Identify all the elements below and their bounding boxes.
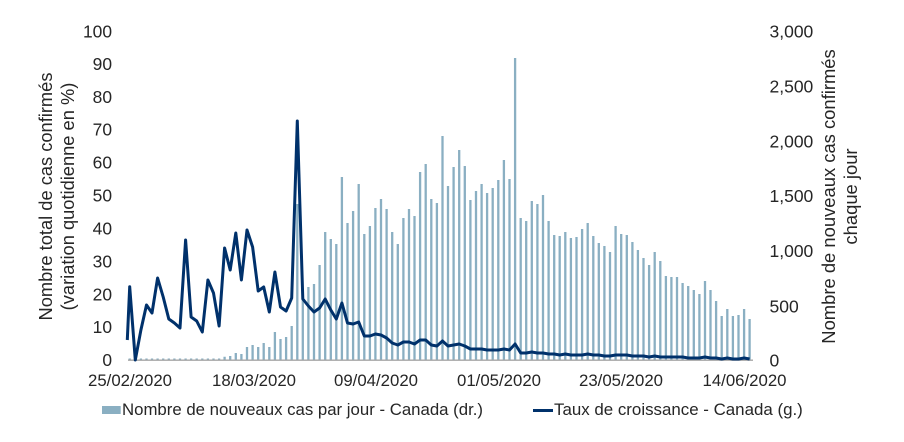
x axis date labels: 14/06/2020 bbox=[702, 371, 786, 390]
left axis tick labels: 60 bbox=[93, 153, 112, 173]
left axis tick labels: 50 bbox=[93, 185, 112, 205]
right axis tick labels bbox=[770, 22, 814, 370]
x axis date labels: 18/03/2020 bbox=[212, 371, 296, 390]
right axis tick labels: 2,500 bbox=[770, 76, 814, 96]
x axis date labels: 23/05/2020 bbox=[579, 371, 663, 390]
left axis tick labels: 0 bbox=[102, 350, 112, 370]
bars: new daily cases bbox=[130, 58, 750, 360]
left axis tick labels: 10 bbox=[93, 317, 112, 337]
right axis tick labels: 2,000 bbox=[770, 132, 814, 152]
right axis title: chaque jour bbox=[840, 148, 861, 245]
left axis title: (variation quotidienne en %) bbox=[57, 83, 78, 310]
legend label: line: Taux de croissance - Canada (g.) bbox=[554, 400, 803, 419]
right axis tick labels: 500 bbox=[770, 296, 799, 316]
left axis tick labels: 80 bbox=[93, 87, 112, 107]
right axis tick labels: 3,000 bbox=[770, 22, 814, 42]
right axis title: Nombre de nouveaux cas confirmés bbox=[818, 49, 839, 344]
line: growth rate bbox=[127, 121, 750, 360]
x axis baseline bbox=[128, 359, 753, 361]
left axis tick labels: 30 bbox=[93, 251, 112, 271]
x axis date labels: 25/02/2020 bbox=[88, 371, 172, 390]
right axis tick labels: 0 bbox=[770, 350, 780, 370]
legend label: bars: Nombre de nouveaux cas par jour - Canada (dr.) bbox=[122, 400, 483, 419]
right axis tick labels: 1,500 bbox=[770, 186, 814, 206]
left axis tick labels: 20 bbox=[93, 284, 112, 304]
x axis date labels: 09/04/2020 bbox=[334, 371, 418, 390]
left axis tick labels: 40 bbox=[93, 218, 112, 238]
legend bbox=[102, 400, 803, 419]
legend swatch: line bbox=[533, 409, 553, 412]
x axis date labels: 01/05/2020 bbox=[457, 371, 541, 390]
left axis tick labels: 100 bbox=[83, 22, 112, 42]
left axis tick labels bbox=[83, 22, 112, 370]
left axis tick labels: 70 bbox=[93, 120, 112, 140]
x axis date labels bbox=[88, 371, 786, 390]
left axis title: Nombre total de cas confirmés bbox=[35, 73, 56, 320]
left axis tick labels: 90 bbox=[93, 54, 112, 74]
right axis tick labels: 1,000 bbox=[770, 241, 814, 261]
legend swatch: bars bbox=[102, 406, 121, 414]
